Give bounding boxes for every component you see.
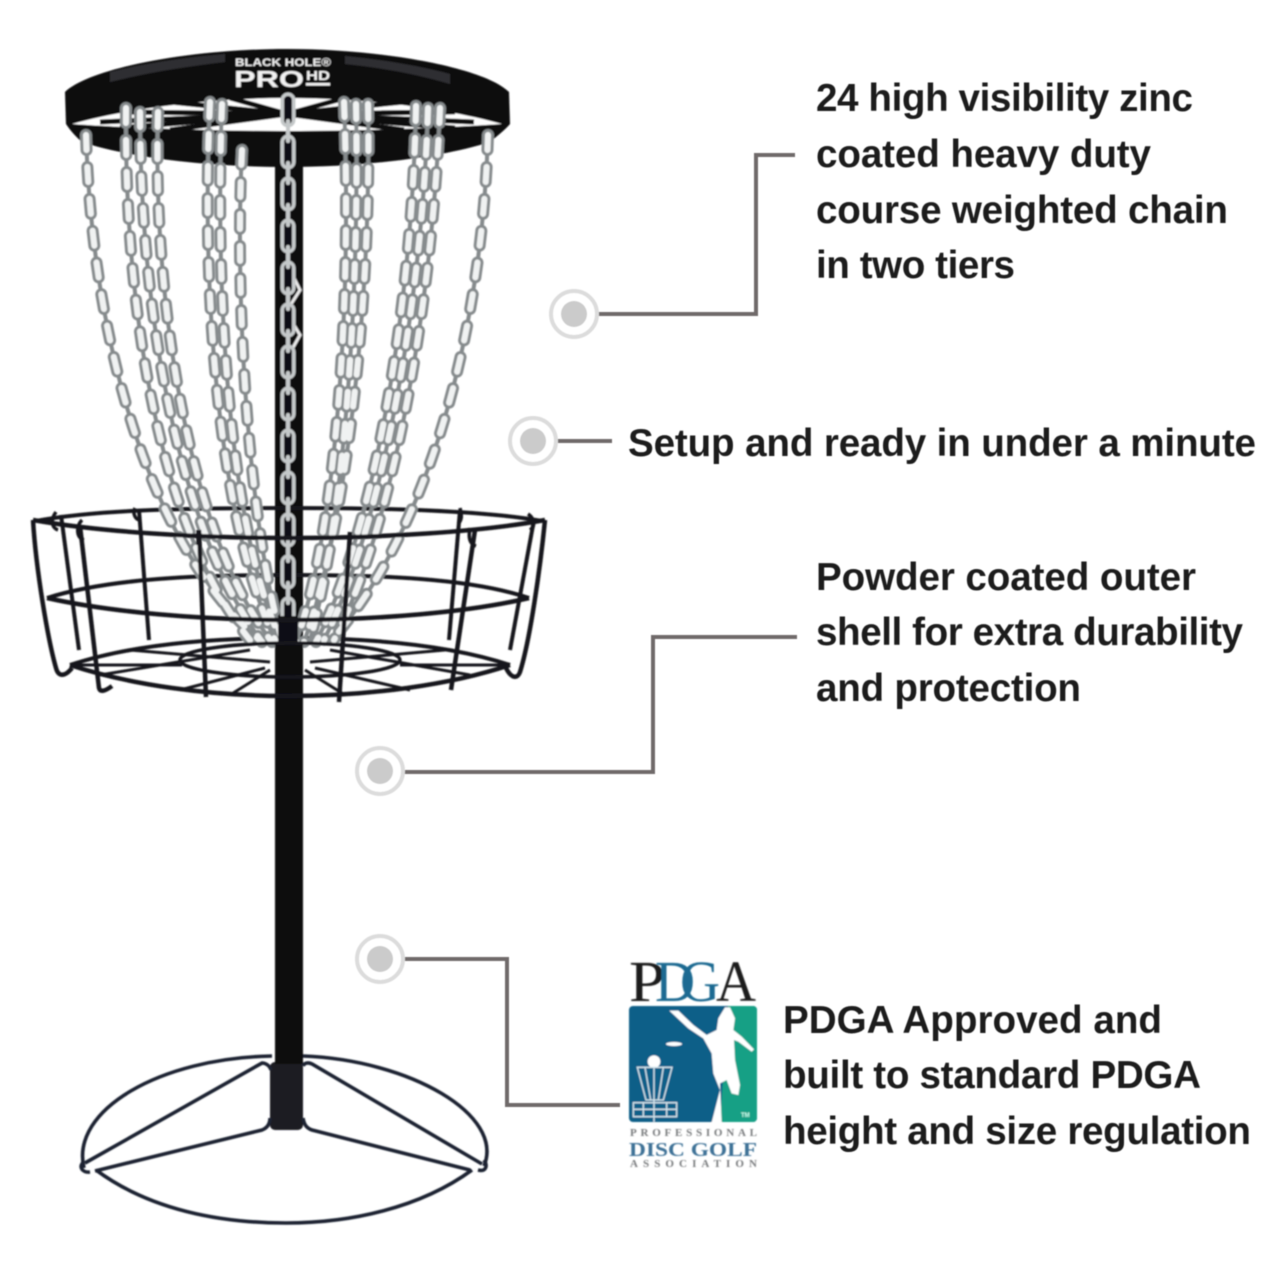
logo wordmark: P [629, 949, 665, 1014]
pole logo [286, 262, 300, 360]
chain collar [278, 616, 298, 646]
rim logo [234, 57, 331, 92]
lower pole [275, 644, 303, 1064]
PDGA logo [629, 949, 757, 1170]
rim opening [72, 98, 502, 131]
text: PDGA [783, 999, 1251, 1153]
logo caption: PROFESSIONAL [630, 1127, 757, 1139]
logo wordmark: A [716, 949, 756, 1014]
disc golf basket [33, 49, 545, 1223]
logo caption: ASSOCIATION [630, 1158, 757, 1170]
rim logo: BLACK HOLE® [235, 57, 331, 69]
text: outer shell: shell for extra durability [816, 611, 1244, 654]
callout: chains [551, 155, 795, 337]
text: chains: coated heavy duty [816, 133, 1152, 176]
marker: outer shell [357, 748, 403, 794]
text: outer shell: and protection [816, 667, 1081, 710]
disc [666, 1042, 682, 1046]
rim logo: HD [306, 68, 330, 83]
text: chains [816, 77, 1228, 287]
rim [65, 49, 510, 167]
text: outer shell: Powder coated outer [816, 556, 1196, 599]
text: chains: course weighted chain [816, 189, 1228, 232]
marker: PDGA [357, 936, 403, 982]
callout: PDGA [357, 936, 620, 1105]
chains [86, 100, 488, 642]
text: setup: Setup and ready in under a minute [628, 422, 1256, 465]
pole [270, 100, 303, 1130]
logo wordmark: D [655, 949, 695, 1014]
logo tile [629, 1006, 757, 1122]
text: PDGA: height and size regulation [783, 1110, 1251, 1153]
back of basket cage [36, 508, 542, 665]
base [81, 1056, 487, 1223]
marker: setup [510, 418, 556, 464]
text: PDGA: built to standard PDGA [783, 1054, 1201, 1097]
player silhouette [669, 1007, 754, 1122]
text: outer shell [816, 556, 1244, 710]
mini basket [633, 1055, 677, 1122]
text: chains: in two tiers [816, 244, 1015, 287]
logo caption [629, 1127, 757, 1170]
center chain [280, 100, 296, 625]
marker: chains [551, 291, 597, 337]
text: PDGA: PDGA Approved and [783, 999, 1162, 1042]
rim logo: PRO [234, 66, 304, 92]
logo wordmark [629, 949, 756, 1014]
text: chains: 24 high visibility zinc [816, 77, 1193, 120]
rim spokes [100, 98, 474, 130]
logo wordmark: G [680, 949, 720, 1014]
callout: outer shell [357, 637, 797, 794]
logo caption: DISC GOLF [629, 1139, 757, 1161]
callout: setup [510, 418, 612, 464]
front of basket cage [33, 508, 545, 702]
trademark: TM [741, 1113, 750, 1119]
